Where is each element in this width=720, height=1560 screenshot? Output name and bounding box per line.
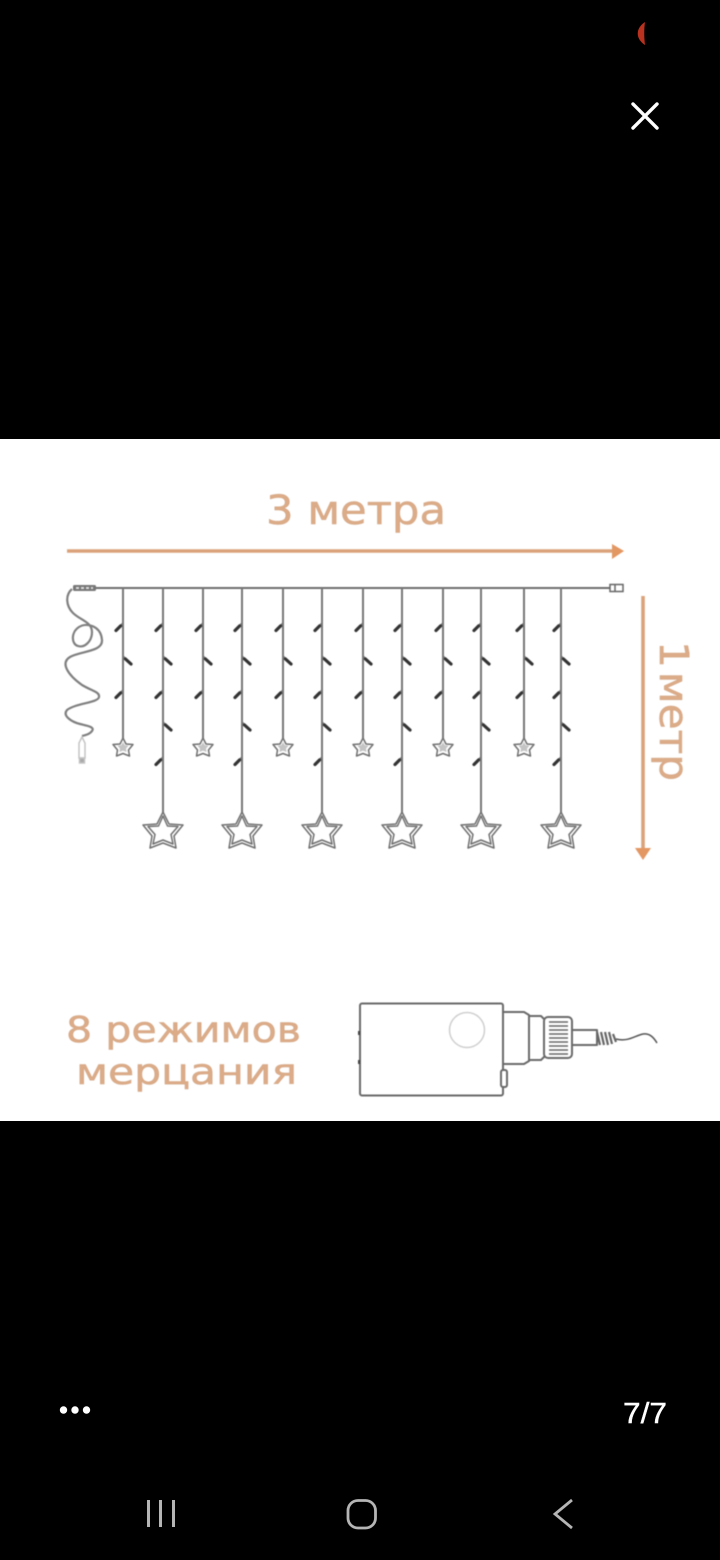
strand 11 short bbox=[514, 588, 534, 756]
stem bbox=[572, 1030, 597, 1045]
icon: red notification sliver bbox=[638, 22, 645, 45]
icon: back bbox=[555, 1500, 572, 1528]
arrow: width bbox=[67, 544, 624, 559]
right connector bbox=[610, 584, 623, 592]
strand 1 short bbox=[113, 588, 133, 756]
string lights diagram bbox=[66, 584, 623, 848]
icon: more dots bbox=[60, 1406, 90, 1414]
left connector bbox=[73, 585, 96, 591]
coil bbox=[597, 1032, 616, 1045]
wire bbox=[616, 1034, 657, 1043]
controller box bbox=[359, 1004, 657, 1096]
icon: close cross bbox=[633, 104, 657, 128]
battery box body bbox=[360, 1004, 503, 1096]
panel: product diagram bbox=[0, 439, 720, 1121]
strand 10 long bbox=[461, 588, 501, 848]
strand 5 short bbox=[273, 588, 293, 756]
connector neck bbox=[503, 1012, 529, 1064]
strand 2 long bbox=[143, 588, 183, 848]
page counter: 7/7 bbox=[623, 1398, 667, 1430]
strand 4 long bbox=[222, 588, 262, 848]
text: flicker modes bbox=[66, 1010, 301, 1093]
threaded nut bbox=[544, 1017, 572, 1058]
connector collar bbox=[529, 1016, 545, 1060]
heading: height label: 1 метр bbox=[650, 641, 696, 781]
heading: width label: 3 метра bbox=[266, 488, 446, 534]
arrow: height bbox=[635, 596, 651, 860]
strand 12 long bbox=[541, 588, 581, 848]
button circle bbox=[450, 1012, 484, 1048]
text: flicker modes: 8 режимов bbox=[66, 1010, 301, 1051]
USB plug bbox=[79, 737, 85, 763]
strand 6 long bbox=[302, 588, 342, 848]
icon: recent apps bbox=[147, 1500, 175, 1527]
icon: home bbox=[348, 1500, 376, 1528]
text: flicker modes: мерцания bbox=[76, 1052, 297, 1093]
nut ridges bbox=[549, 1022, 568, 1054]
power cable bbox=[66, 589, 102, 736]
main horizontal wire bbox=[96, 587, 610, 589]
side notches bbox=[358, 1031, 360, 1064]
strand 3 short bbox=[193, 588, 213, 756]
strand 9 short bbox=[433, 588, 453, 756]
strand 8 long bbox=[382, 588, 422, 848]
strand 7 short bbox=[353, 588, 373, 756]
side switch bbox=[501, 1070, 507, 1087]
